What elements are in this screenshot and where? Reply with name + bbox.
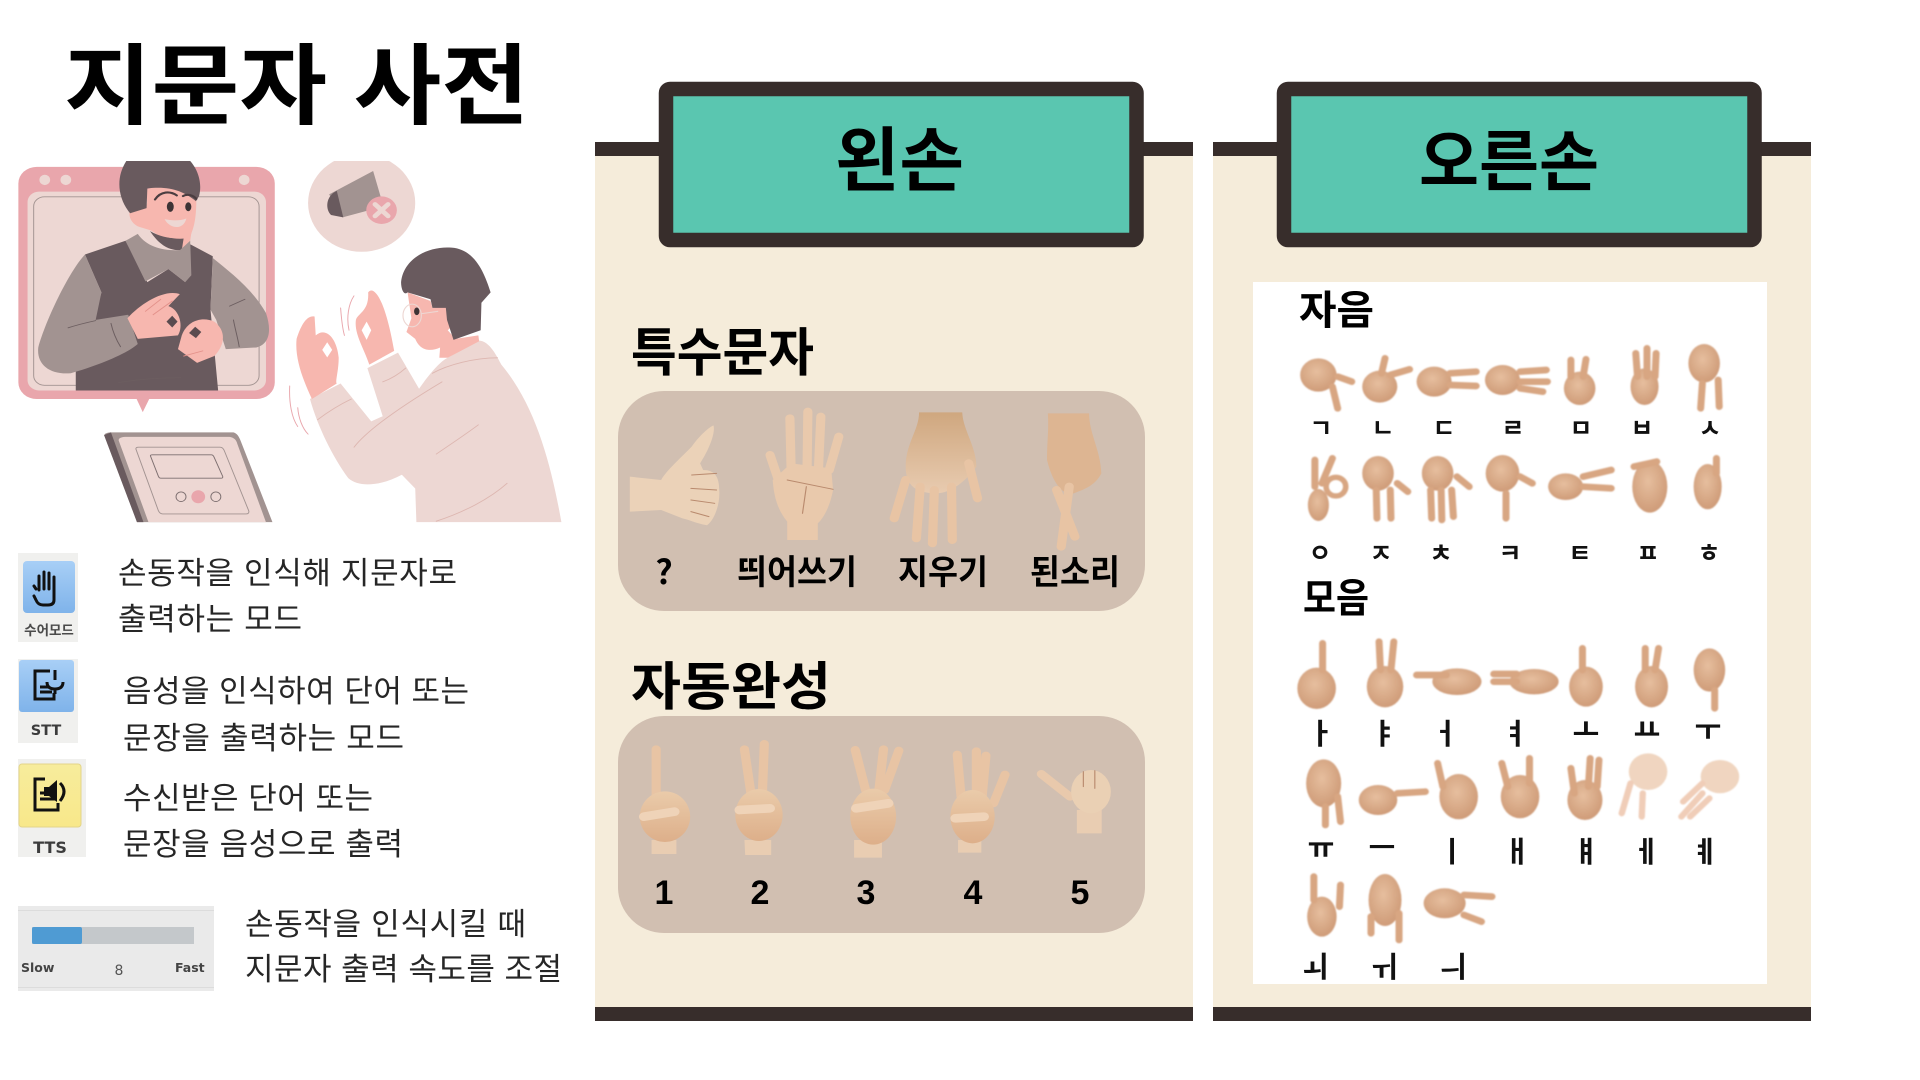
chart: fingerspelling alphabet: ㅌ bbox=[1568, 534, 1592, 570]
labels: vowels: ㅓ bbox=[1432, 711, 1458, 753]
header: right hand bbox=[1284, 89, 1754, 240]
card: special characters bbox=[618, 391, 1145, 611]
description: sign mode: 출력하는 모드 bbox=[118, 594, 302, 639]
card: special characters: 띄어쓰기 bbox=[737, 545, 857, 594]
labels: consonants: ㅅ bbox=[1698, 409, 1722, 445]
viewer man bbox=[290, 248, 561, 522]
header: right hand: 오른손 bbox=[1419, 109, 1599, 205]
labels: vowels: ㅜ bbox=[1695, 707, 1721, 749]
header: left hand bbox=[666, 89, 1136, 240]
labels: vowels: ㅛ bbox=[1634, 707, 1660, 749]
chart: fingerspelling alphabet: ㅠ bbox=[1308, 825, 1334, 867]
signing man bbox=[38, 161, 269, 390]
chart: fingerspelling alphabet: ㅡ bbox=[1369, 825, 1395, 867]
chart: fingerspelling alphabet: ㅊ bbox=[1429, 534, 1453, 570]
mode legend: STT bbox=[18, 659, 78, 743]
window frame bbox=[18, 167, 275, 412]
chart: fingerspelling alphabet: ㅋ bbox=[1498, 534, 1522, 570]
mode legend: sign mode: 수어모드 bbox=[24, 619, 74, 639]
labels: consonants: ㄹ bbox=[1501, 409, 1525, 445]
card: autocomplete: 5 bbox=[1071, 874, 1089, 912]
hands: vowels bbox=[1297, 642, 1739, 940]
chart: fingerspelling alphabet bbox=[1253, 278, 1767, 986]
heading: special characters: 특수문자 bbox=[631, 311, 814, 386]
labels: consonants: ㄴ bbox=[1371, 409, 1395, 445]
description: TTS: 수신받은 단어 또는 bbox=[123, 773, 373, 818]
panel: left hand bbox=[595, 89, 1193, 1021]
card: autocomplete: 4 bbox=[964, 874, 983, 912]
speed slider: 8 bbox=[115, 963, 123, 979]
speed slider bbox=[18, 906, 214, 991]
illustration: sign language video call bbox=[18, 154, 561, 522]
labels: numbers: 1 bbox=[655, 874, 673, 912]
chart: fingerspelling alphabet: ㅣ bbox=[1439, 829, 1465, 871]
labels: consonants: ㅁ bbox=[1569, 409, 1593, 445]
card: autocomplete: 3 bbox=[857, 874, 875, 912]
mode legend: TTS bbox=[18, 759, 86, 857]
description: STT: 음성을 인식하여 단어 또는 bbox=[123, 666, 469, 711]
labels: special characters: ? bbox=[655, 545, 673, 594]
heading: consonants: 자음 bbox=[1299, 278, 1374, 336]
labels: consonants: ㅂ bbox=[1630, 409, 1654, 445]
hand photos: number signs bbox=[640, 744, 1111, 858]
panel: right hand bbox=[1213, 89, 1811, 1021]
icon: document with speaker bbox=[35, 779, 58, 810]
title: 지문자 사전 bbox=[64, 16, 529, 143]
card: autocomplete bbox=[618, 716, 1145, 933]
chart: fingerspelling alphabet: ㅍ bbox=[1636, 534, 1660, 570]
mode legend: TTS: TTS bbox=[33, 838, 67, 857]
labels: vowels: ㅏ bbox=[1308, 711, 1334, 753]
description: slider: 지문자 출력 속도를 조절 bbox=[245, 944, 562, 989]
labels: vowels: ㅑ bbox=[1371, 711, 1397, 753]
mode legend: STT: STT bbox=[31, 723, 61, 739]
chart: fingerspelling alphabet: ㅢ bbox=[1440, 944, 1466, 986]
card: special characters: 된소리 bbox=[1030, 545, 1120, 594]
header: left hand: 왼손 bbox=[835, 105, 964, 206]
mode legend: sign mode bbox=[18, 553, 78, 642]
description: TTS: 문장을 음성으로 출력 bbox=[123, 819, 403, 864]
description: STT: 문장을 출력하는 모드 bbox=[123, 713, 404, 758]
labels: consonants: ㄷ bbox=[1432, 409, 1456, 445]
chart: fingerspelling alphabet: ㅔ bbox=[1633, 829, 1659, 871]
chart: fingerspelling alphabet: ㅚ bbox=[1302, 944, 1328, 986]
chart: fingerspelling alphabet: ㅒ bbox=[1573, 829, 1599, 871]
chart: fingerspelling alphabet: ㅟ bbox=[1371, 944, 1397, 986]
labels: vowels: ㅕ bbox=[1502, 711, 1528, 753]
tablet bbox=[104, 432, 272, 522]
chart: fingerspelling alphabet: ㅖ bbox=[1692, 829, 1718, 871]
hands: consonants bbox=[1300, 344, 1722, 521]
card: autocomplete: 2 bbox=[751, 874, 769, 912]
icon: muted megaphone bbox=[308, 154, 415, 252]
chart: fingerspelling alphabet: ㅎ bbox=[1697, 534, 1721, 570]
labels: vowels: ㅗ bbox=[1573, 707, 1599, 749]
labels: consonants: ㄱ bbox=[1309, 409, 1333, 445]
icon: hand bbox=[34, 572, 54, 605]
chart: fingerspelling alphabet: ㅐ bbox=[1504, 829, 1530, 871]
speed slider: Fast bbox=[175, 960, 205, 975]
card: special characters: 지우기 bbox=[898, 545, 988, 594]
description: slider: 손동작을 인식시킬 때 bbox=[245, 899, 526, 944]
description: sign mode: 손동작을 인식해 지문자로 bbox=[118, 548, 457, 593]
speed slider: Slow bbox=[21, 960, 55, 975]
heading: vowels: 모음 bbox=[1303, 566, 1369, 624]
hand photos: special characters bbox=[630, 412, 1101, 547]
icon: document with microphone bbox=[35, 670, 63, 699]
chart: fingerspelling alphabet: ㅇ bbox=[1308, 534, 1332, 570]
chart: fingerspelling alphabet: ㅈ bbox=[1369, 534, 1393, 570]
heading: autocomplete: 자동완성 bbox=[631, 645, 831, 720]
